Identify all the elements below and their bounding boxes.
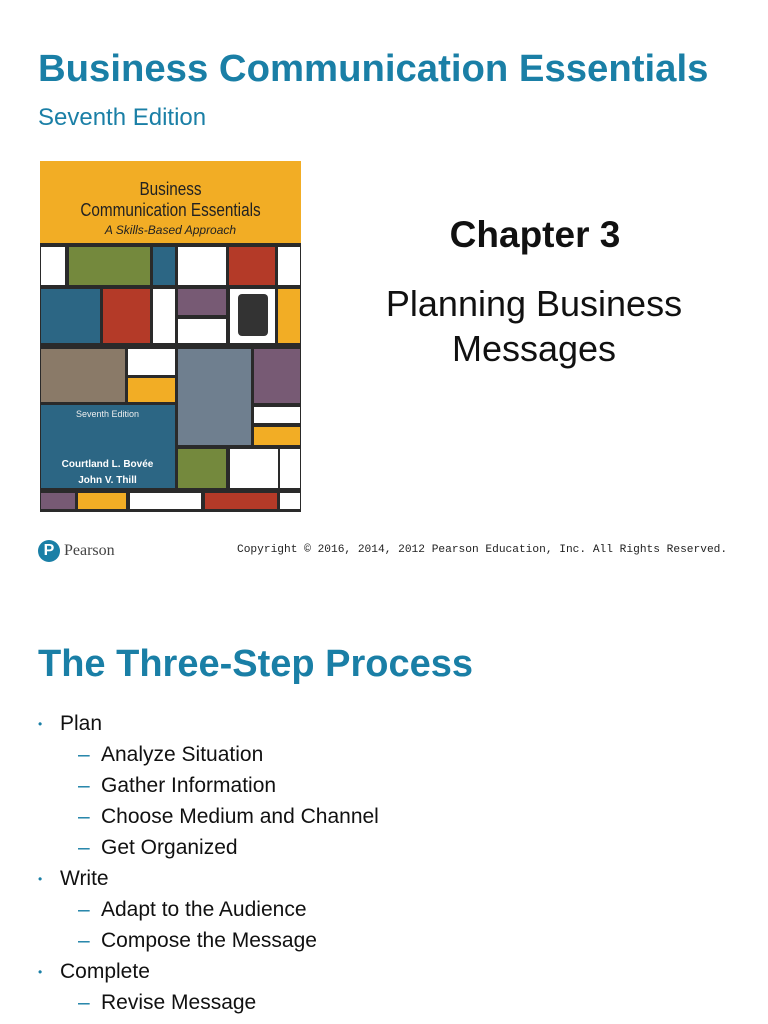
bullet list: Compose the Message <box>101 929 317 952</box>
bullet list: • <box>38 717 42 731</box>
bullet list: – <box>78 805 90 828</box>
bullet list: Revise Message <box>101 991 256 1014</box>
bullet list: Plan <box>60 712 102 735</box>
bullet list: • <box>38 965 42 979</box>
bullet list: Choose Medium and Channel <box>101 805 379 828</box>
section heading: The Three-Step Process <box>38 643 473 685</box>
logo: Pearson <box>38 540 115 562</box>
book cover: Business <box>139 179 202 199</box>
logo: Pearson: Pearson <box>64 542 115 559</box>
book cover: Communication Essentials <box>80 200 261 220</box>
book cover: Seventh Edition <box>76 409 139 419</box>
bullet list: Gather Information <box>101 774 276 797</box>
book cover <box>40 161 301 512</box>
chapter heading: Chapter 3 <box>450 214 620 255</box>
bullet list: – <box>78 898 90 921</box>
copyright: Copyright © 2016, 2014, 2012 Pearson Education, Inc. All Rights Reserved. <box>237 544 727 556</box>
bullet list: Adapt to the Audience <box>101 898 306 921</box>
bullet list: Complete <box>60 960 150 983</box>
bullet list <box>38 712 379 1014</box>
book cover: Courtland L. Bovée <box>62 459 153 470</box>
bullet list: – <box>78 929 90 952</box>
title: Business Communication Essentials <box>38 47 708 90</box>
bullet list: Get Organized <box>101 836 238 859</box>
bullet list: – <box>78 743 90 766</box>
subtitle: Seventh Edition <box>38 104 206 131</box>
logo: Pearson: P <box>44 542 54 559</box>
book cover: A Skills-Based Approach <box>105 223 236 237</box>
bullet list: Analyze Situation <box>101 743 263 766</box>
book cover: John V. Thill <box>78 475 137 486</box>
bullet list: – <box>78 991 90 1014</box>
bullet list: – <box>78 774 90 797</box>
chapter title: Planning Business Messages <box>386 283 682 369</box>
bullet list: – <box>78 836 90 859</box>
bullet list: Write <box>60 867 109 890</box>
bullet list: • <box>38 872 42 886</box>
